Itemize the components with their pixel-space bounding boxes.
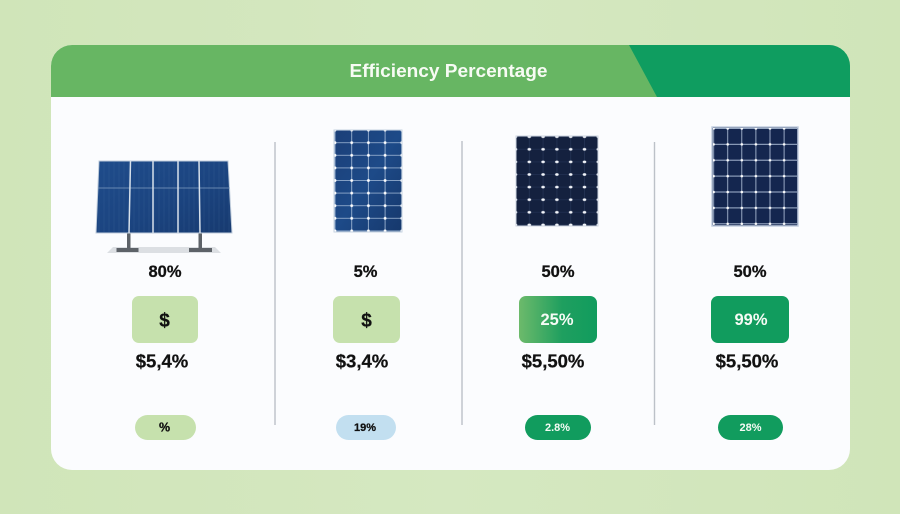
rating pill: 2.8%: [545, 422, 570, 434]
column 3: [516, 136, 598, 440]
price value: $5,50%: [522, 350, 584, 372]
title: Efficiency Percentage: [350, 61, 548, 81]
efficiency box: 25%: [540, 311, 574, 329]
efficiency value: 5%: [354, 263, 378, 281]
cost box: [333, 296, 400, 343]
rating pill: 19%: [354, 422, 376, 434]
rating pill: [135, 415, 196, 440]
efficiency value: 80%: [148, 263, 182, 281]
efficiency box: 99%: [734, 311, 768, 329]
rating pill: [718, 415, 783, 440]
cost box: $: [361, 310, 372, 332]
rating pill: [336, 415, 396, 440]
icon: ground-mounted solar array: [96, 161, 232, 253]
efficiency box: [711, 296, 789, 343]
efficiency box: [519, 296, 597, 343]
price value: $3,4%: [336, 350, 388, 372]
column 1: [96, 161, 232, 440]
rating pill: 28%: [739, 422, 762, 434]
header banner: [51, 45, 850, 97]
price value: $5,50%: [716, 350, 778, 372]
column 4: [711, 127, 798, 440]
efficiency value: 50%: [733, 263, 767, 281]
icon: dark rounded-cell panel: [712, 127, 798, 226]
icon: monocrystalline panel: [516, 136, 598, 226]
cost box: [132, 296, 198, 343]
price value: $5,4%: [136, 350, 188, 372]
panel: comparison card: [51, 45, 850, 470]
cost box: $: [159, 310, 170, 332]
rating pill: [525, 415, 591, 440]
column 2: [333, 130, 402, 440]
divider lines: [275, 141, 654, 425]
icon: polycrystalline panel: [334, 130, 402, 232]
rating pill: %: [159, 420, 170, 434]
efficiency value: 50%: [541, 263, 575, 281]
